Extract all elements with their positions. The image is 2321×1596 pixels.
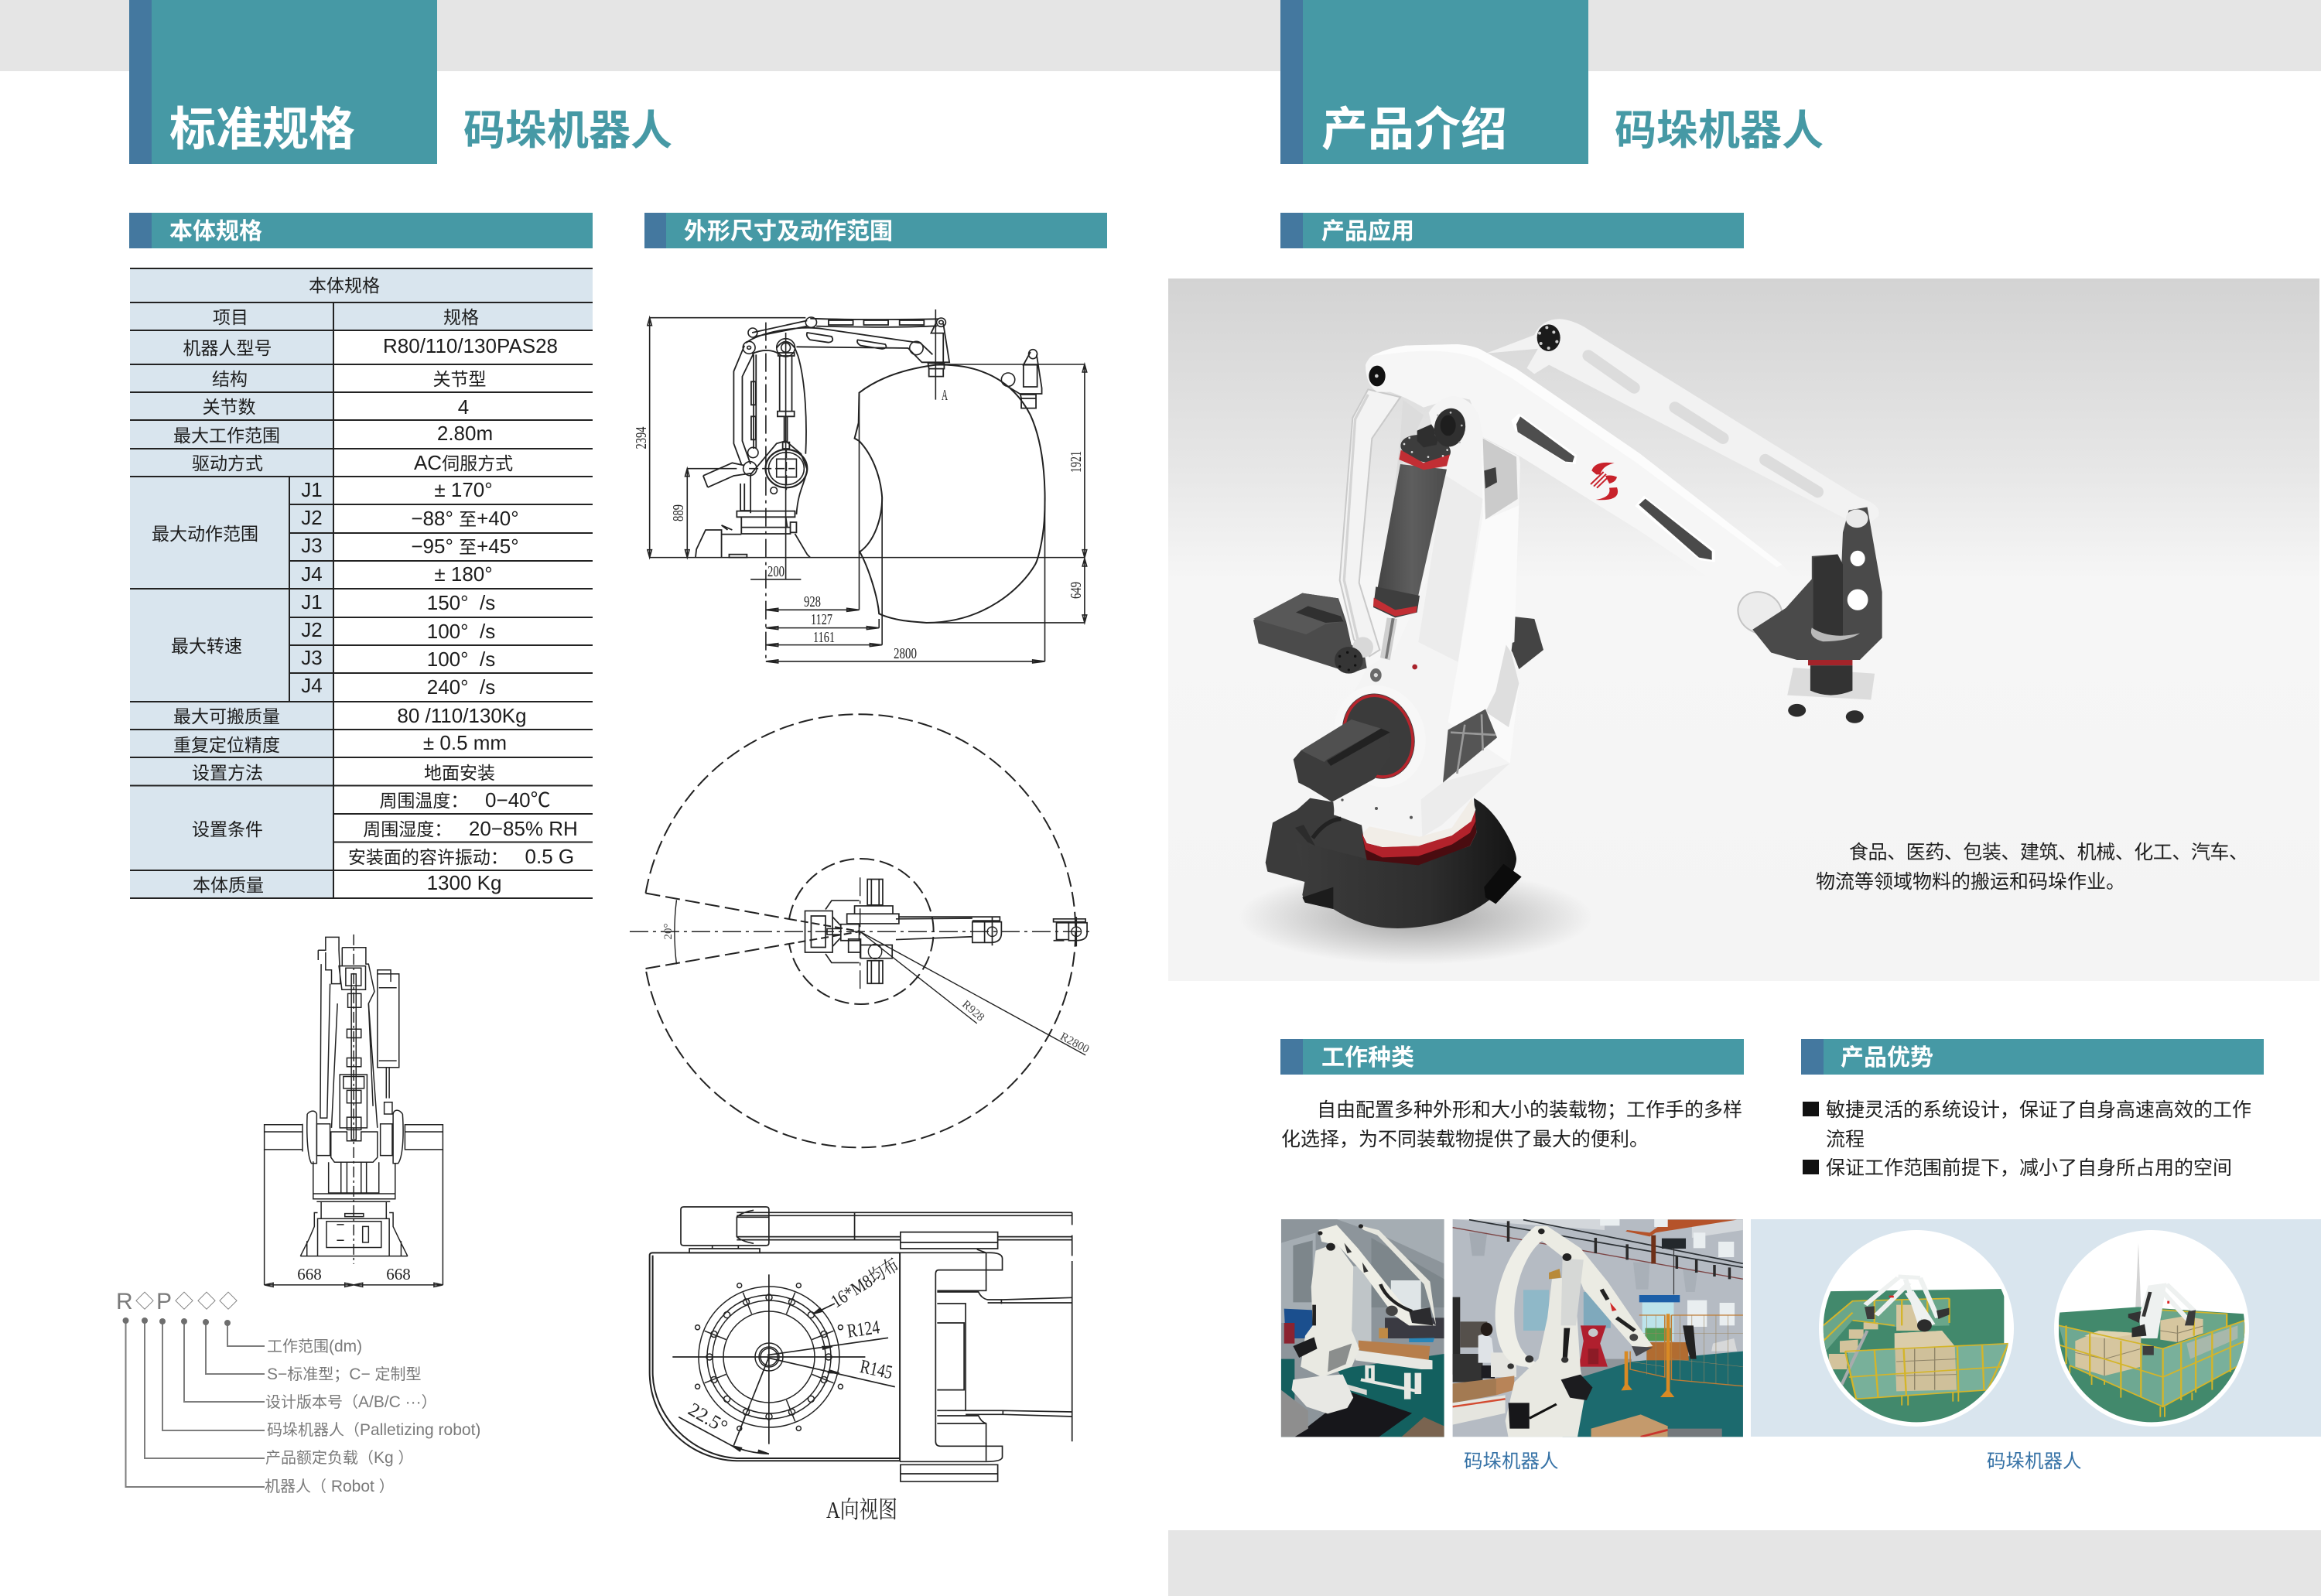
legend labels: 机器人（ Robot ） [265, 1478, 395, 1495]
specification table: 规格 [443, 307, 479, 327]
dimension labels: 200 [767, 563, 784, 580]
specification table: 240° /s [427, 675, 495, 699]
section bar: product application [1280, 213, 1744, 248]
scene: line palletizing [1821, 1276, 2008, 1423]
base black [1266, 798, 1367, 882]
caption: photos: 码垛机器人 [1464, 1451, 1558, 1472]
specification table: J2 [301, 506, 323, 529]
legend labels: 工作范围(dm) [267, 1338, 362, 1355]
hero caption: 食品、医药、包装、建筑、机械、化工、汽车、 [1849, 842, 2248, 863]
code letters: ◇ [197, 1291, 216, 1312]
specification table: 最大动作范围 [152, 524, 258, 544]
dimension: 668 right: 668 [386, 1265, 411, 1283]
cylinder bottom cap [1373, 586, 1420, 617]
specification table: AC伺服方式 [414, 451, 513, 474]
column body [1334, 396, 1520, 837]
specification table: J1 [301, 590, 323, 613]
specification table: 100° /s [427, 620, 495, 643]
code letters: ◇ [135, 1291, 154, 1312]
specification table: J2 [301, 618, 323, 641]
code letters: R [116, 1289, 133, 1314]
specification table: 80 /110/130Kg [397, 704, 527, 727]
lift cylinder [1377, 464, 1447, 601]
arm slot 2 [1635, 496, 1715, 562]
specification table: 驱动方式 [192, 453, 263, 473]
specification table: 最大工作范围 [173, 425, 280, 446]
joint pins [1369, 366, 1386, 386]
section bar: body specs: 本体规格 [169, 219, 262, 244]
specification table: 本体质量 [193, 875, 264, 895]
outer and inner dashed reach [645, 714, 1075, 1147]
bottom grey band [1168, 1530, 2321, 1596]
product advantages list: 敏捷灵活的系统设计，保证了自身高速高效的工作 [1826, 1099, 2251, 1121]
specification table: 4 [458, 395, 469, 419]
front view drawing [265, 935, 443, 1287]
application panel [1751, 1219, 2321, 1437]
left circle ring [1819, 1230, 2014, 1427]
dimension: 668 left: 668 [297, 1265, 322, 1283]
header: standard specifications [129, 0, 672, 164]
upper link [1486, 319, 1879, 528]
specification table: 机器人型号 [183, 338, 272, 358]
small bolts on lower block [1341, 798, 1413, 819]
section bar: dimensions and range [644, 213, 1107, 248]
hollow side link [1340, 389, 1400, 656]
specification table: −95° 至+45° [411, 535, 519, 558]
dimension labels: 2800 [894, 645, 917, 662]
heading: 产品介绍: 产品介绍 [1321, 104, 1507, 155]
wire bracket [1295, 825, 1315, 846]
specification table: 1300 Kg [427, 871, 501, 894]
dimension labels: 928 [804, 593, 821, 610]
subheading: palletizing robot left: 码垛机器人 [463, 108, 672, 154]
leader lines [125, 1321, 265, 1487]
work types text [1281, 1099, 1742, 1150]
R928 label: R928 [959, 998, 986, 1024]
dark end flange with bolts [1335, 647, 1363, 674]
top view work range [630, 714, 1092, 1147]
dimension labels: 2394 [633, 427, 650, 449]
photo: robot in workshop [1453, 1219, 1743, 1437]
rear link strand [1393, 400, 1424, 516]
model code legend [116, 1289, 480, 1495]
section bar: work types [1280, 1039, 1744, 1075]
flange callouts: 22.5° [685, 1399, 731, 1438]
legend labels: S−标准型；C− 定制型 [267, 1365, 422, 1383]
specification table: J1 [301, 478, 323, 501]
logo [1591, 463, 1618, 500]
motor flange [1320, 672, 1440, 800]
elbow disc [1731, 584, 1789, 641]
specification table: J4 [301, 674, 323, 697]
specification table: 结构 [212, 369, 248, 389]
arm slot 1 [1511, 413, 1577, 464]
specification table: J3 [301, 534, 323, 557]
dimension labels: 889 [670, 504, 687, 521]
specification table: 关节型 [433, 369, 486, 389]
motor [1294, 719, 1390, 802]
dimension labels: 1127 [811, 611, 832, 628]
dimension lines [648, 318, 1087, 663]
ribbed window [1443, 709, 1497, 783]
section bar: body specs [129, 213, 593, 248]
section bar: product advantages [1801, 1039, 2264, 1075]
specification table: 本体规格 [309, 275, 380, 296]
caption: scenes: 码垛机器人 [1987, 1451, 2081, 1472]
floor shadow [1238, 869, 1594, 965]
legend labels: 码垛机器人（Palletizing robot) [267, 1421, 480, 1439]
code letters: P [156, 1289, 172, 1314]
photo: robot with conveyor [1281, 1219, 1444, 1437]
heading: 标准规格: 标准规格 [169, 104, 355, 155]
specification table: 周围温度： 0−40℃ [379, 788, 551, 812]
dimension labels: 1161 [813, 629, 835, 646]
work types text: 自由配置多种外形和大小的装载物；工作手的多样 [1317, 1099, 1742, 1121]
product advantages list [1803, 1099, 2251, 1179]
code letters [116, 1289, 238, 1314]
leader dots [122, 1317, 231, 1326]
link disc [1537, 324, 1560, 351]
scene: corner palletizing [2059, 1243, 2245, 1423]
R2800 label: R2800 [1058, 1030, 1091, 1056]
turret ring red [1362, 810, 1476, 865]
view A flange drawing [650, 1207, 1072, 1523]
specification table: 安装面的容许振动： 0.5 G [348, 845, 574, 868]
hero panel: robot render [1168, 279, 2319, 981]
main robot [1253, 319, 1879, 928]
specification table: 设置方法 [192, 763, 263, 783]
caption: view A: A向视图 [826, 1496, 897, 1523]
cylinder top cap [1398, 431, 1453, 466]
section bar: product advantages: 产品优势 [1841, 1045, 1933, 1071]
specification table: 重复定位精度 [173, 735, 280, 755]
specification table: 设置条件 [192, 819, 263, 839]
section bar: work types: 工作种类 [1321, 1045, 1414, 1071]
specification table: 最大可搬质量 [173, 706, 280, 726]
dimension labels: A [942, 387, 948, 404]
specification table: 2.80m [437, 422, 493, 445]
angle label: 20° [662, 924, 675, 939]
specification table: R80/110/130PAS28 [383, 334, 558, 357]
specification table: 地面安装 [424, 763, 495, 783]
main arm [1366, 344, 1806, 631]
dimension labels [633, 387, 1085, 662]
robot outline [746, 319, 949, 363]
flange callouts: R124 [846, 1317, 881, 1342]
specification table: ± 0.5 mm [423, 731, 507, 754]
flange callouts: R145 [858, 1356, 894, 1383]
counterweight [1253, 593, 1367, 673]
specification table: J3 [301, 646, 323, 669]
piston rod [1380, 617, 1397, 660]
specification table: −88° 至+40° [411, 507, 519, 530]
dimension labels: 649 [1068, 582, 1085, 599]
specification table: J4 [301, 562, 323, 586]
specification table: 150° /s [427, 591, 495, 614]
specification table: ± 170° [434, 478, 493, 501]
product advantages list: 流程 [1826, 1129, 1865, 1150]
header: product introduction [1280, 0, 1824, 164]
side view with work envelope [633, 309, 1087, 663]
right circle ring [2054, 1230, 2249, 1427]
code letters: ◇ [219, 1291, 238, 1312]
hero caption [1816, 842, 2248, 893]
end plate [1787, 668, 1875, 700]
hero caption: 物流等领域物料的搬运和码垛作业。 [1816, 871, 2125, 893]
dimension labels: 1921 [1068, 451, 1085, 473]
legend labels [265, 1338, 480, 1495]
flange callouts: 16*M8均布 [827, 1254, 903, 1312]
legend labels: 产品额定负载（Kg ） [265, 1449, 414, 1467]
back dark block [1507, 617, 1543, 669]
specification table [130, 268, 593, 898]
column shaded side [1483, 439, 1518, 520]
specification table: 项目 [213, 307, 248, 327]
product advantages list: 保证工作范围前提下，减小了自身所占用的空间 [1826, 1157, 2232, 1179]
specification table: ± 180° [434, 562, 493, 586]
top grey band [0, 0, 2321, 71]
specification table: 周围湿度： 20−85% RH [363, 817, 578, 840]
subheading: palletizing robot right: 码垛机器人 [1615, 108, 1824, 154]
section bar: dimensions and range: 外形尺寸及动作范围 [684, 219, 893, 244]
work envelope [855, 365, 1045, 623]
specification table: 关节数 [203, 397, 255, 417]
specification table: 最大转速 [171, 636, 242, 656]
specification table: 100° /s [427, 648, 495, 671]
code letters: ◇ [175, 1291, 193, 1312]
wrist and end flange [1752, 507, 1882, 723]
section bar: product application: 产品应用 [1321, 219, 1414, 244]
flange callouts [685, 1254, 903, 1438]
suction cups [1788, 704, 1864, 723]
lower base block shade [1421, 764, 1510, 837]
legend labels: 设计版本号（A/B/C ···） [265, 1393, 437, 1411]
work types text: 化选择，为不同装载物提供了最大的便利。 [1281, 1129, 1649, 1150]
